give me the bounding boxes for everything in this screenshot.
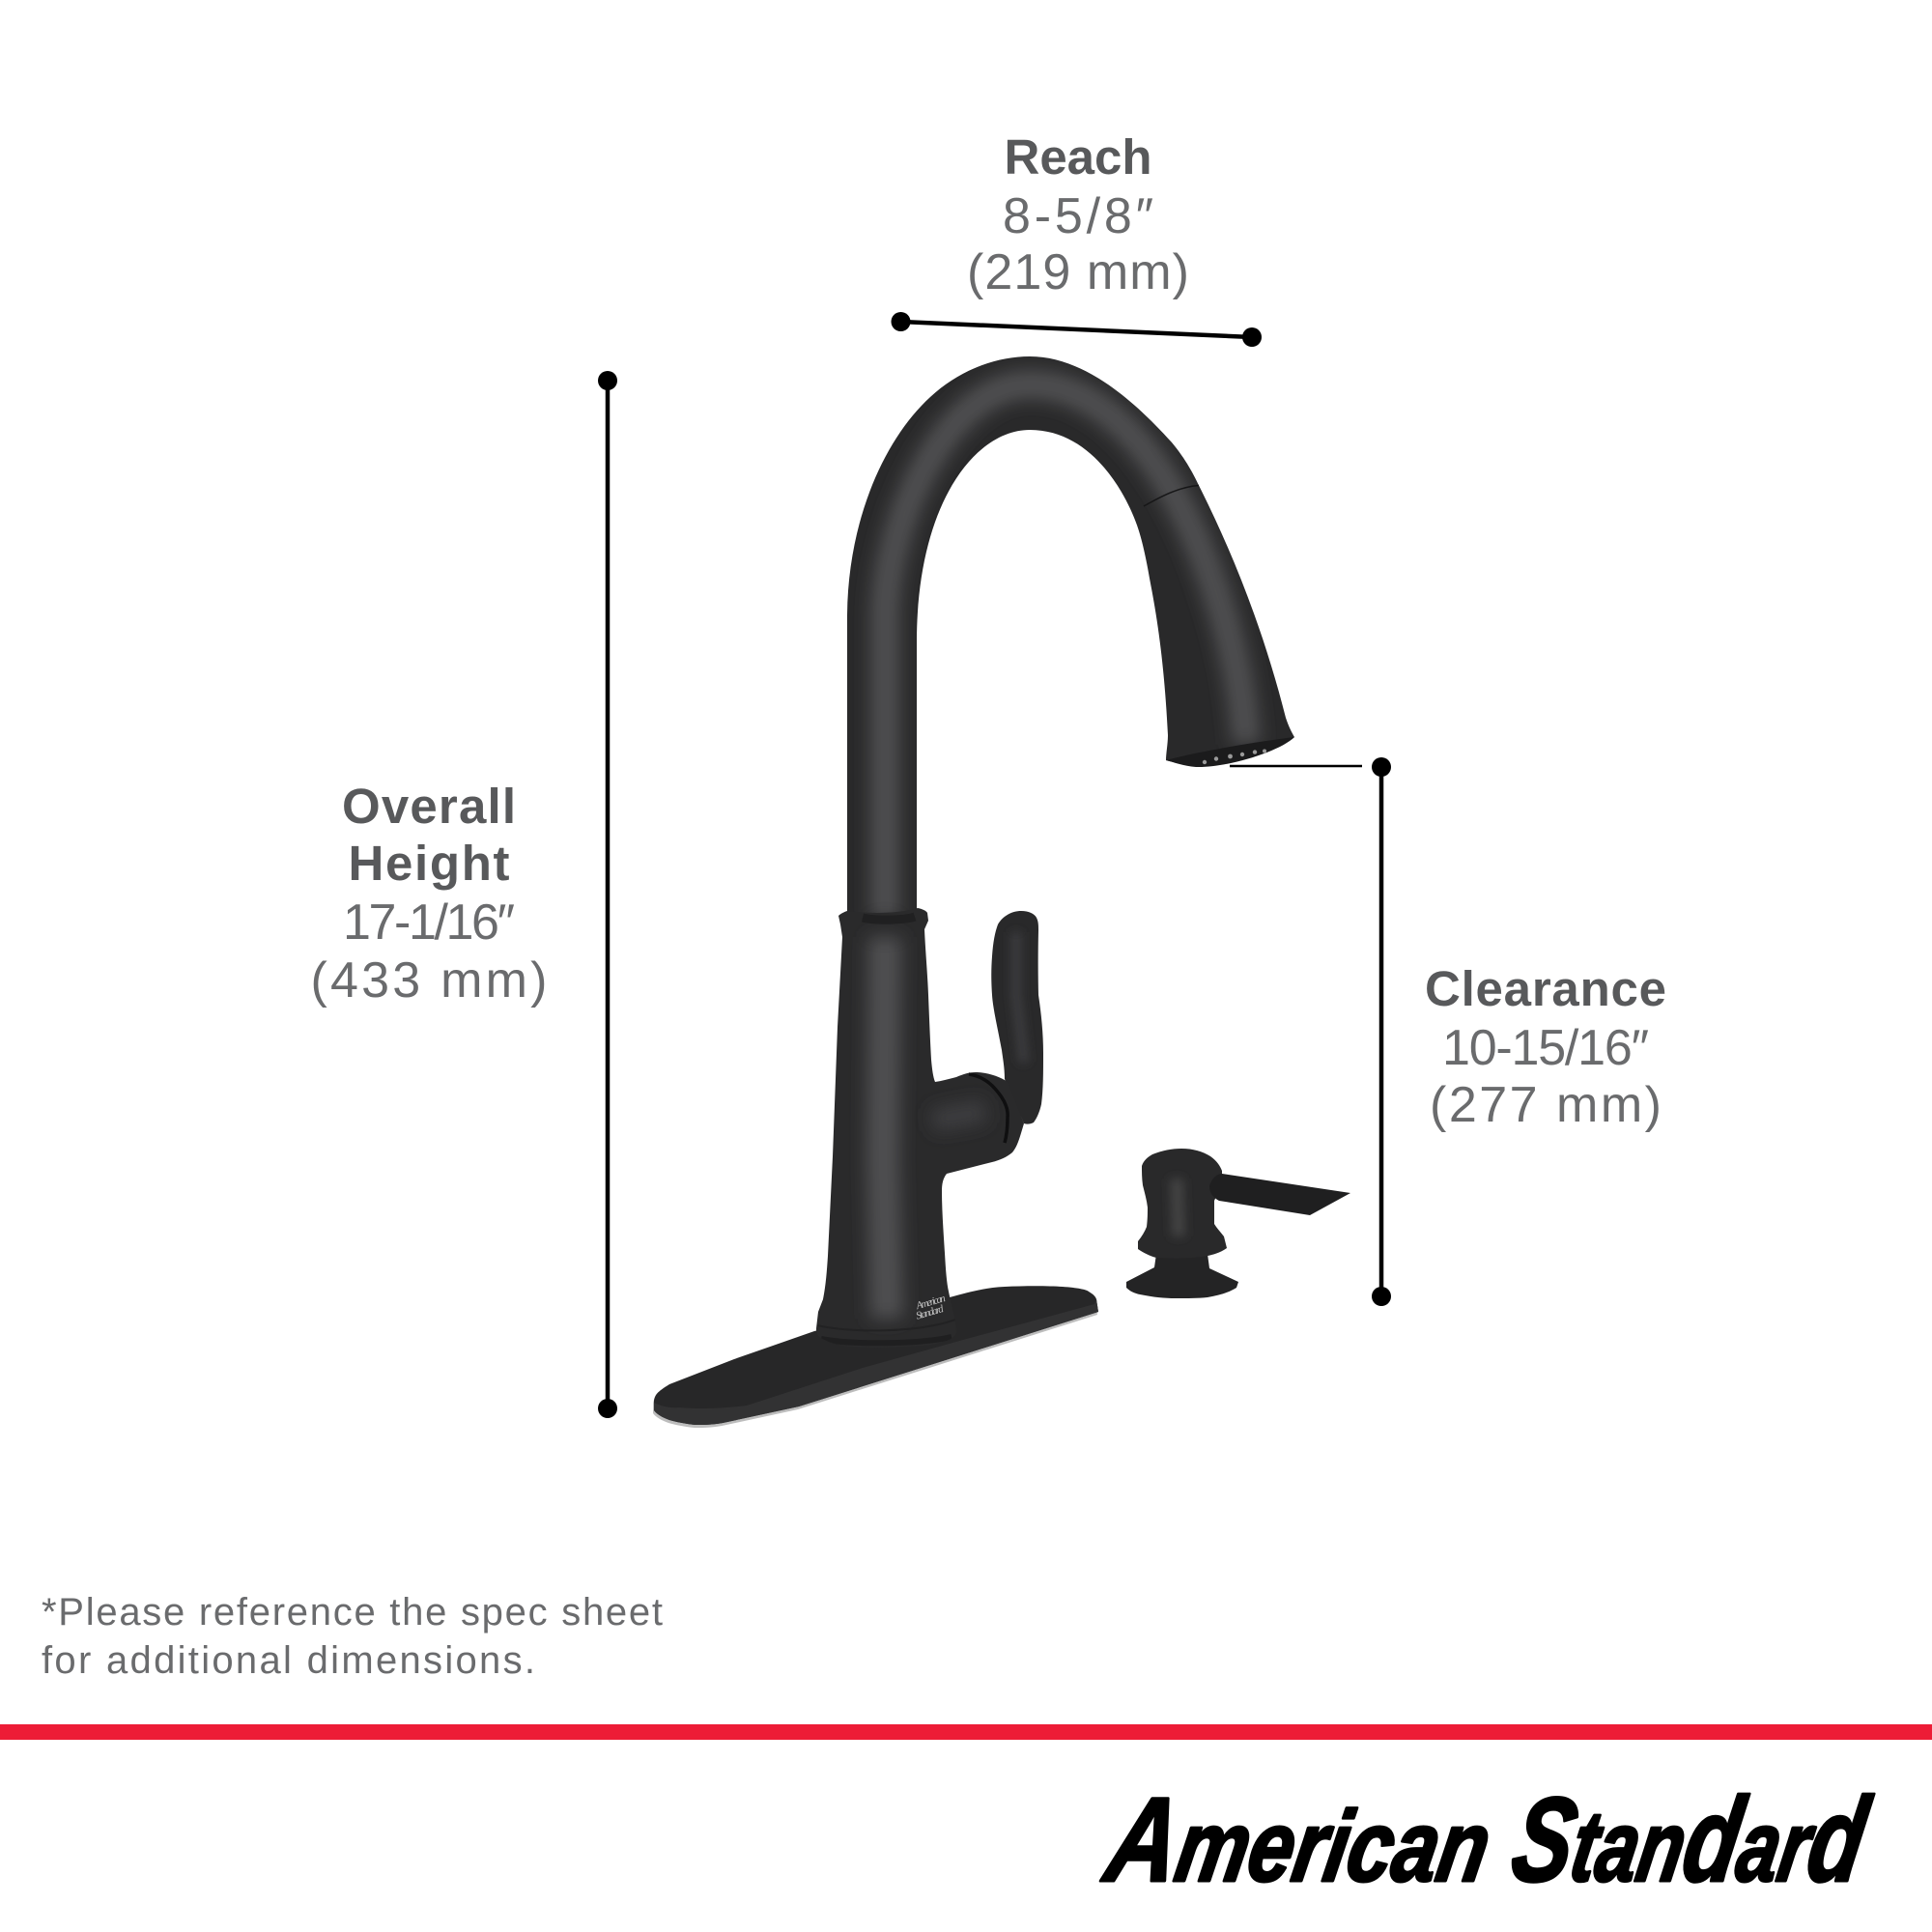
footnote: for additional dimensions. (42, 1639, 535, 1682)
clearance label (1425, 961, 1666, 1133)
dispenser body (1138, 1149, 1227, 1259)
collar logo engraving: American (914, 1293, 948, 1312)
overall height label (311, 779, 547, 1009)
clearance label: (277 mm) (1430, 1077, 1662, 1133)
soap dispenser (1126, 1149, 1350, 1298)
overall height dimension line (598, 371, 617, 1418)
reach dimension line (891, 312, 1262, 347)
overall height label: Height (348, 836, 510, 891)
reach label: 8-5/8″ (1003, 188, 1153, 244)
American Standard logo (1095, 1774, 1879, 1907)
dispenser pump spout (1209, 1174, 1350, 1215)
faucet handle (991, 911, 1043, 1124)
clearance label: 10-15/16″ (1442, 1020, 1649, 1076)
faucet illustration (653, 356, 1294, 1428)
reach label (967, 129, 1189, 300)
dispenser base plate (1126, 1254, 1238, 1298)
deck plate (653, 1286, 1098, 1428)
collar logo engraving (912, 1293, 950, 1322)
reach label: Reach (1005, 129, 1151, 185)
footnote: *Please reference the spec sheet (42, 1591, 663, 1634)
clearance label: Clearance (1425, 961, 1666, 1016)
faucet spout (847, 356, 1294, 918)
faucet body (816, 908, 1024, 1348)
footnote (42, 1591, 663, 1682)
American Standard logo: American (1095, 1774, 1502, 1907)
clearance dimension line (1230, 757, 1391, 1306)
collar logo engraving: Standard (915, 1303, 946, 1322)
red divider bar (0, 1724, 1932, 1740)
reach label: (219 mm) (967, 244, 1189, 300)
overall height label: (433 mm) (311, 952, 547, 1009)
overall height label: Overall (342, 779, 516, 834)
overall height label: 17-1/16″ (343, 895, 515, 951)
American Standard logo: Standard (1503, 1774, 1879, 1907)
